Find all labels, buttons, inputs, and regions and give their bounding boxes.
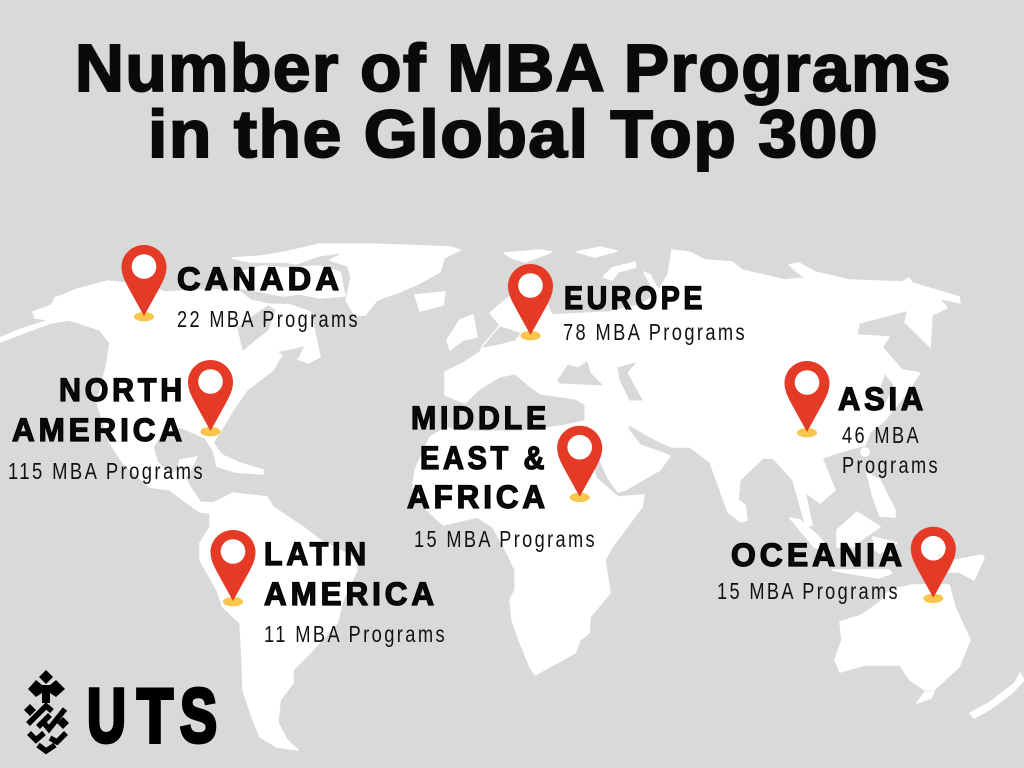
- label: Latin America: 11 MBA Programs: [264, 621, 447, 647]
- sea: Mediterranean: [447, 375, 584, 430]
- label: North America: NORTH: [59, 372, 186, 408]
- landmass: Java: [832, 570, 892, 578]
- landmass: Svalbard: [504, 250, 552, 262]
- logo wordmark: S: [180, 674, 217, 759]
- landmass: Australia: [835, 585, 970, 690]
- logo wordmark: T: [137, 674, 173, 759]
- sea: Sea of Japan: [880, 375, 893, 410]
- label: North America: [8, 372, 205, 484]
- landmass: Borneo: [837, 512, 880, 547]
- label: Latin America: [264, 536, 447, 647]
- label: Middle East and Africa: 15 MBA Programs: [414, 526, 597, 552]
- label: Middle East and Africa: AFRICA: [407, 479, 549, 515]
- landmass: New Guinea: [945, 555, 984, 580]
- label: Canada: [177, 261, 360, 332]
- landmass: Philippines: [867, 473, 895, 517]
- logo wordmark: U: [87, 674, 126, 759]
- pin: North America: [188, 360, 233, 436]
- sea: Black Sea: [558, 362, 602, 385]
- label: Asia: 46 MBA: [842, 422, 921, 448]
- pin: Europe: [508, 264, 553, 340]
- label: Canada: 22 MBA Programs: [177, 306, 360, 332]
- label: Latin America: LATIN: [264, 536, 370, 572]
- label: Asia: ASIA: [838, 381, 927, 417]
- landmass: Eurasia and Africa: [413, 250, 960, 675]
- sea: Gulf of St Lawrence: [279, 347, 303, 358]
- inland seas: [238, 306, 893, 430]
- label: Oceania: [717, 537, 906, 604]
- world map: [0, 244, 1024, 750]
- pin: Oceania: [911, 527, 956, 603]
- label: Middle East and Africa: EAST &: [420, 440, 548, 476]
- label: Europe: EUROPE: [564, 280, 706, 316]
- landmass: Iceland: [415, 292, 445, 311]
- label: North America: 115 MBA Programs: [8, 458, 205, 484]
- heading: title: in the Global Top 300: [148, 97, 879, 172]
- logo wordmark: [87, 674, 217, 759]
- pin: Middle East and Africa: [557, 426, 602, 502]
- landmass: Franz Josef Land: [577, 247, 617, 257]
- pin: Asia: [784, 361, 830, 437]
- landmass: Arctic Canada islands: [240, 266, 345, 298]
- heading: title: Number of MBA Programs: [75, 31, 952, 106]
- landmass: Novaya Zemlya: [603, 262, 636, 280]
- pin: Latin America: [210, 530, 256, 606]
- landmass: Sulawesi: [873, 537, 897, 553]
- landmass: British Isles: [447, 315, 477, 350]
- landmass: the Americas: [0, 281, 357, 750]
- landmass: New Zealand: [970, 673, 1024, 718]
- sea: Caspian: [618, 363, 642, 400]
- sea: Baltic: [483, 327, 520, 347]
- label: Canada: CANADA: [177, 261, 343, 297]
- landmass: Tasmania: [917, 692, 934, 703]
- landmass: Taiwan: [861, 448, 869, 456]
- landmass: Greenland: [232, 244, 460, 316]
- label: Asia: Programs: [842, 452, 940, 478]
- label: Oceania: 15 MBA Programs: [717, 578, 900, 604]
- icon: UTS crest: [24, 670, 69, 751]
- label: Oceania: OCEANIA: [731, 537, 906, 573]
- label: Europe: [563, 280, 747, 345]
- label: Asia: [838, 381, 940, 478]
- label: Latin America: AMERICA: [264, 576, 438, 612]
- logo: UTS: [24, 670, 217, 759]
- landmass: Arctic islands: [644, 272, 660, 293]
- landmass: Sumatra: [790, 518, 830, 550]
- label: Europe: 78 MBA Programs: [563, 319, 747, 345]
- label: Middle East and Africa: [407, 400, 597, 552]
- sea: Hudson Bay: [238, 306, 275, 350]
- label: North America: AMERICA: [12, 412, 186, 448]
- heading: title: [75, 31, 952, 172]
- pin: Canada: [122, 245, 166, 321]
- label: Middle East and Africa: MIDDLE: [411, 400, 550, 436]
